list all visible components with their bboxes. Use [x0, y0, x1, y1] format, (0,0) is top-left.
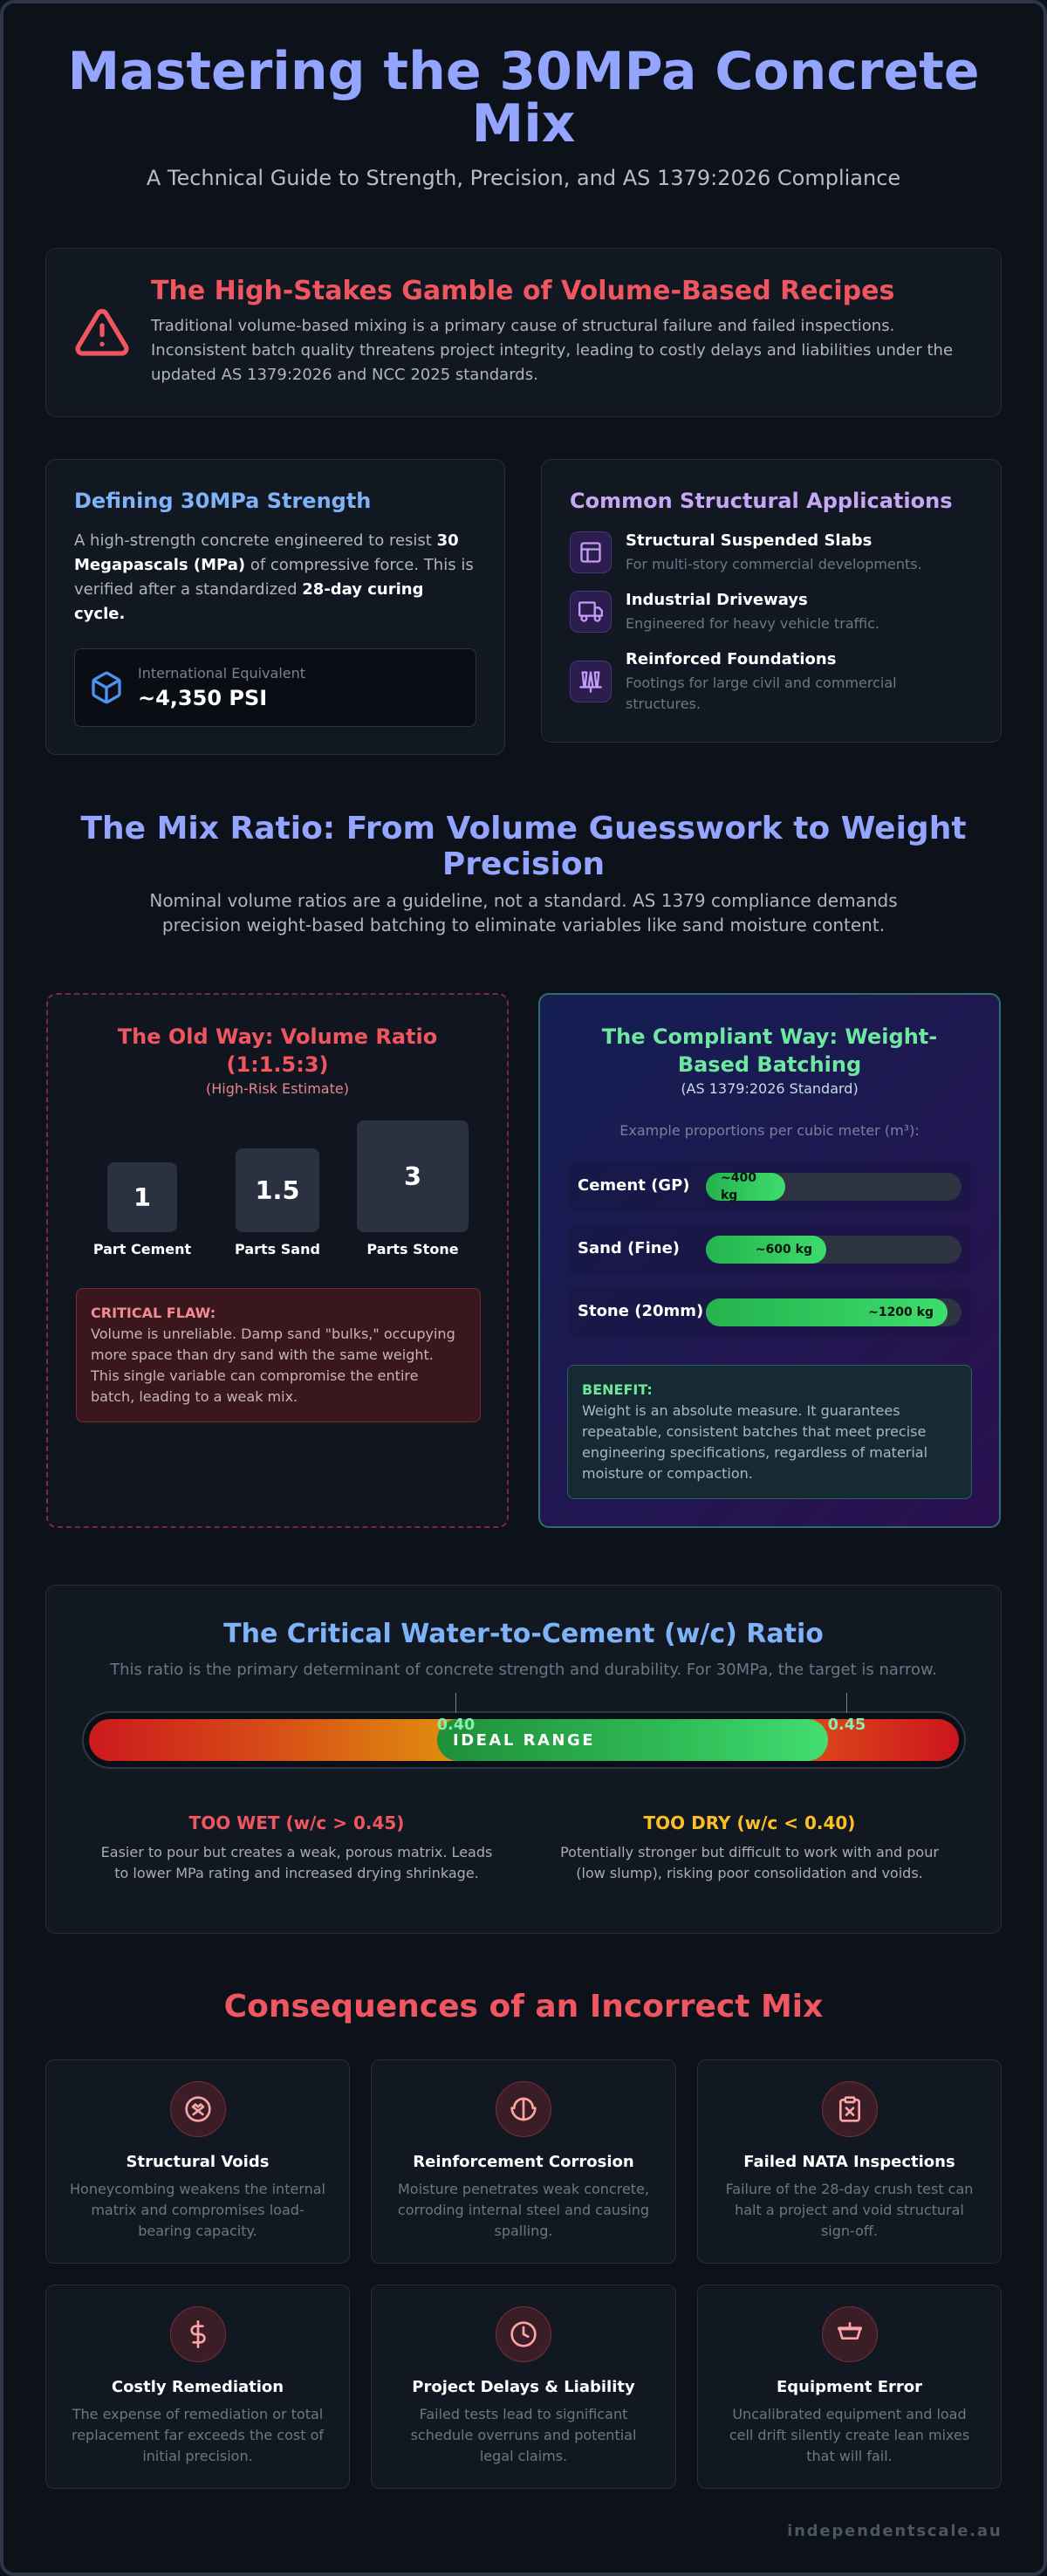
text: reinforcement corrosion: corroding internal steel and causing [398, 2201, 649, 2218]
title: project delays: Project Delays & Liability [412, 2377, 635, 2396]
subheading: standard: (AS 1379:2026 Standard) [681, 1080, 859, 1096]
title [67, 41, 980, 154]
too wet text: to lower MPa rating and increased drying shrinkage. [114, 1864, 479, 1881]
icon: warning triangle [75, 309, 129, 356]
marker label 0.40: 0.40 [437, 1716, 475, 1734]
warning body text: updated AS 1379:2026 and NCC 2025 standards. [151, 366, 538, 384]
card: structural voids [45, 2059, 350, 2264]
gauge gradient bar [89, 1719, 959, 1761]
application note: foundations: Footings for large civil and commercial [626, 674, 897, 691]
block: 1 part cement: 1 [133, 1182, 151, 1212]
panel: common structural applications [541, 459, 1002, 743]
text: project delays: schedule overruns and potential [411, 2426, 636, 2443]
bar row: stone: Stone (20mm) [578, 1302, 703, 1320]
label: part cement: Part Cement [93, 1241, 191, 1257]
bar row: cement: kg [721, 1189, 737, 1202]
bar row: sand [568, 1225, 971, 1274]
text: reinforcement corrosion: spalling. [494, 2222, 553, 2239]
card: equipment error [697, 2285, 1002, 2489]
panel: water-to-cement ratio [45, 1585, 1002, 1934]
definition text: Megapascals (MPa) of compressive force. This is [74, 556, 474, 574]
icon: slab layout [570, 531, 612, 573]
icon: dollar sign [169, 2306, 225, 2362]
text: failed inspections [726, 2180, 973, 2239]
application: suspended slabs: Structural Suspended Slabs [626, 531, 872, 550]
too wet text [101, 1843, 492, 1881]
heading: applications: Common Structural Applications [570, 489, 953, 513]
label: parts stone: Parts Stone [366, 1241, 459, 1257]
proportions caption: Example proportions per cubic meter (m³): [619, 1122, 920, 1138]
text: failed inspections: Failure of the 28-day crush test can [726, 2180, 973, 2197]
text: equipment error [729, 2405, 969, 2464]
heading: defining strength: Defining 30MPa Strength [74, 489, 371, 513]
callout: benefit: Weight is an absolute measure. It guarantees [582, 1402, 900, 1419]
icon: corrosion [496, 2081, 551, 2137]
section heading: consequences: Consequences of an Incorrect Mix [224, 1988, 823, 2024]
card: reinforcement corrosion [371, 2059, 676, 2264]
text: costly remediation: initial precision. [142, 2447, 253, 2464]
too dry text: (low slump), risking poor consolidation and voids. [576, 1864, 923, 1881]
text: project delays: Failed tests lead to significant [420, 2405, 627, 2422]
title: Mix [471, 93, 575, 154]
section intro: Nominal volume ratios are a guideline, not a standard. AS 1379 compliance demands [149, 890, 898, 911]
definition text: verified after a standardized 28-day curing [74, 580, 424, 599]
subtitle: A Technical Guide to Strength, Precision, and AS 1379:2026 Compliance [147, 166, 900, 190]
text: costly remediation: replacement far exceeds the cost of [72, 2426, 324, 2443]
equivalent value: ~4,350 PSI [138, 686, 267, 710]
application note: driveways: Engineered for heavy vehicle traffic. [626, 614, 879, 632]
icon: clipboard x [822, 2081, 878, 2137]
callout: international equivalent [74, 648, 476, 727]
too dry text: Potentially stronger but difficult to work with and pour [560, 1843, 939, 1860]
callout: benefit: repeatable, consistent batches that meet precise [582, 1423, 926, 1440]
callout: benefit: engineering specifications, regardless of material [582, 1444, 927, 1461]
warning body text: Inconsistent batch quality threatens project integrity, leading to costly delays and liabilities under the [151, 341, 953, 360]
text: equipment error: Uncalibrated equipment and load [732, 2405, 967, 2422]
bar row: stone: ~1200 kg [868, 1305, 934, 1319]
icon: clock [496, 2306, 551, 2362]
application note: foundations: structures. [626, 695, 701, 712]
icon: cube [92, 672, 121, 703]
definition text [74, 531, 474, 623]
equivalent label: International Equivalent [138, 665, 305, 681]
application: foundations: Reinforced Foundations [626, 649, 836, 668]
callout: critical flaw: batch, leading to a weak mix. [91, 1388, 298, 1405]
panel: defining 30MPa strength [45, 459, 505, 755]
callout: critical flaw: more space than dry sand with the same weight. [91, 1346, 434, 1363]
heading: old way [117, 1024, 437, 1077]
heading: compliant way [602, 1024, 937, 1077]
text: costly remediation: The expense of remediation or total [72, 2405, 323, 2422]
ideal range label: IDEAL RANGE [453, 1731, 595, 1749]
title: equipment error: Equipment Error [777, 2377, 922, 2396]
text: costly remediation [72, 2405, 325, 2464]
text: structural voids: matrix and compromises load- [91, 2201, 305, 2218]
icon: foundation [570, 661, 612, 702]
card: failed NATA inspections [697, 2059, 1002, 2264]
heading: w/c ratio: The Critical Water-to-Cement (w/c) Ratio [223, 1619, 824, 1649]
w/c description: This ratio is the primary determinant of concrete strength and durability. For 30MPa, the target is narrow. [110, 1660, 937, 1679]
marker line 0.45 [846, 1693, 847, 1713]
text: project delays: legal claims. [480, 2447, 567, 2464]
icon: basket [822, 2306, 878, 2362]
title: structural voids: Structural Voids [127, 2152, 269, 2171]
card: costly remediation [45, 2285, 350, 2489]
too wet text: Easier to pour but creates a weak, porous matrix. Leads [101, 1843, 492, 1860]
text: equipment error: cell drift silently create lean mixes [729, 2426, 969, 2443]
callout: critical flaw [76, 1288, 481, 1422]
label: parts sand: Parts Sand [235, 1241, 320, 1257]
callout: critical flaw: Volume is unreliable. Damp sand "bulks," occupying [91, 1326, 455, 1342]
block: 3 parts stone: 3 [404, 1161, 421, 1191]
callout: critical flaw: CRITICAL FLAW: [91, 1305, 216, 1321]
section intro: precision weight-based batching to eliminate variables like sand moisture content. [162, 915, 885, 935]
callout: critical flaw: This single variable can compromise the entire [91, 1367, 418, 1384]
text: equipment error: that will fail. [806, 2447, 893, 2464]
marker label 0.45: 0.45 [828, 1716, 866, 1734]
text: structural voids [70, 2180, 325, 2239]
warning body text: Traditional volume-based mixing is a primary cause of structural failure and failed inspections. [151, 317, 894, 335]
text: failed inspections: halt a project and void structural [735, 2201, 964, 2218]
panel: high-stakes warning [45, 248, 1002, 417]
marker line 0.40 [455, 1693, 456, 1713]
heading: compliant way: The Compliant Way: Weight- [602, 1024, 937, 1049]
gauge: w/c range [82, 1711, 966, 1769]
heading: old way: The Old Way: Volume Ratio [118, 1024, 437, 1049]
block: 3 parts stone [357, 1120, 469, 1232]
icon: voids [169, 2081, 225, 2137]
block: 1 part cement [107, 1162, 177, 1232]
heading: compliant way: Based Batching [678, 1052, 861, 1077]
heading: old way: (1:1.5:3) [226, 1052, 329, 1077]
footer: website: independentscale.au [787, 2522, 1002, 2539]
block: 1.5 parts sand: 1.5 [255, 1175, 300, 1205]
title: reinforcement corrosion: Reinforcement Corrosion [413, 2152, 634, 2171]
warning body text [150, 317, 953, 384]
application: driveways: Industrial Driveways [626, 590, 808, 609]
bar row: cement: Cement (GP) [578, 1176, 689, 1195]
bar row: cement: ~400 [721, 1171, 756, 1185]
callout: benefit [567, 1365, 972, 1499]
section heading: mix ratio: The Mix Ratio: From Volume Guesswork to Weight [80, 810, 967, 846]
icon: truck [570, 591, 612, 633]
card: project delays [371, 2285, 676, 2489]
title: Mastering the 30MPa Concrete [67, 41, 980, 102]
too wet heading: TOO WET (w/c > 0.45) [189, 1812, 404, 1833]
panel: the compliant way [538, 993, 1001, 1528]
bar row: sand: Sand (Fine) [578, 1239, 680, 1257]
text: structural voids: Honeycombing weakens the internal [70, 2180, 325, 2197]
text: reinforcement corrosion: Moisture penetrates weak concrete, [398, 2180, 649, 2197]
too dry text [560, 1843, 939, 1881]
section heading: mix ratio [80, 810, 967, 881]
ideal range segment [436, 1719, 828, 1761]
warning heading: The High-Stakes Gamble of Volume-Based Recipes [151, 276, 894, 305]
title: costly remediation: Costly Remediation [112, 2377, 284, 2396]
section intro [149, 890, 898, 935]
definition text: A high-strength concrete engineered to resist 30 [74, 531, 459, 550]
text: project delays [411, 2405, 636, 2464]
text: failed inspections: sign-off. [821, 2222, 878, 2239]
panel: the old way [46, 993, 509, 1528]
section heading: mix ratio: Precision [442, 846, 605, 881]
block: 1.5 parts sand [236, 1148, 319, 1232]
subheading: high-risk estimate: (High-Risk Estimate) [206, 1080, 349, 1096]
bar row: cement [568, 1162, 971, 1211]
callout: benefit: BENEFIT: [582, 1381, 653, 1398]
title: failed inspections: Failed NATA Inspections [743, 2152, 955, 2171]
application note: slabs: For multi-story commercial developments. [626, 555, 922, 572]
too dry heading: TOO DRY (w/c < 0.40) [644, 1812, 855, 1833]
callout: benefit: moisture or compaction. [582, 1465, 753, 1482]
text: structural voids: bearing capacity. [138, 2222, 257, 2239]
bar row: stone [568, 1288, 971, 1337]
bar row: sand: ~600 kg [756, 1243, 812, 1257]
text: reinforcement corrosion [398, 2180, 649, 2239]
definition text: cycle. [74, 605, 125, 623]
application note: foundations [626, 674, 897, 712]
